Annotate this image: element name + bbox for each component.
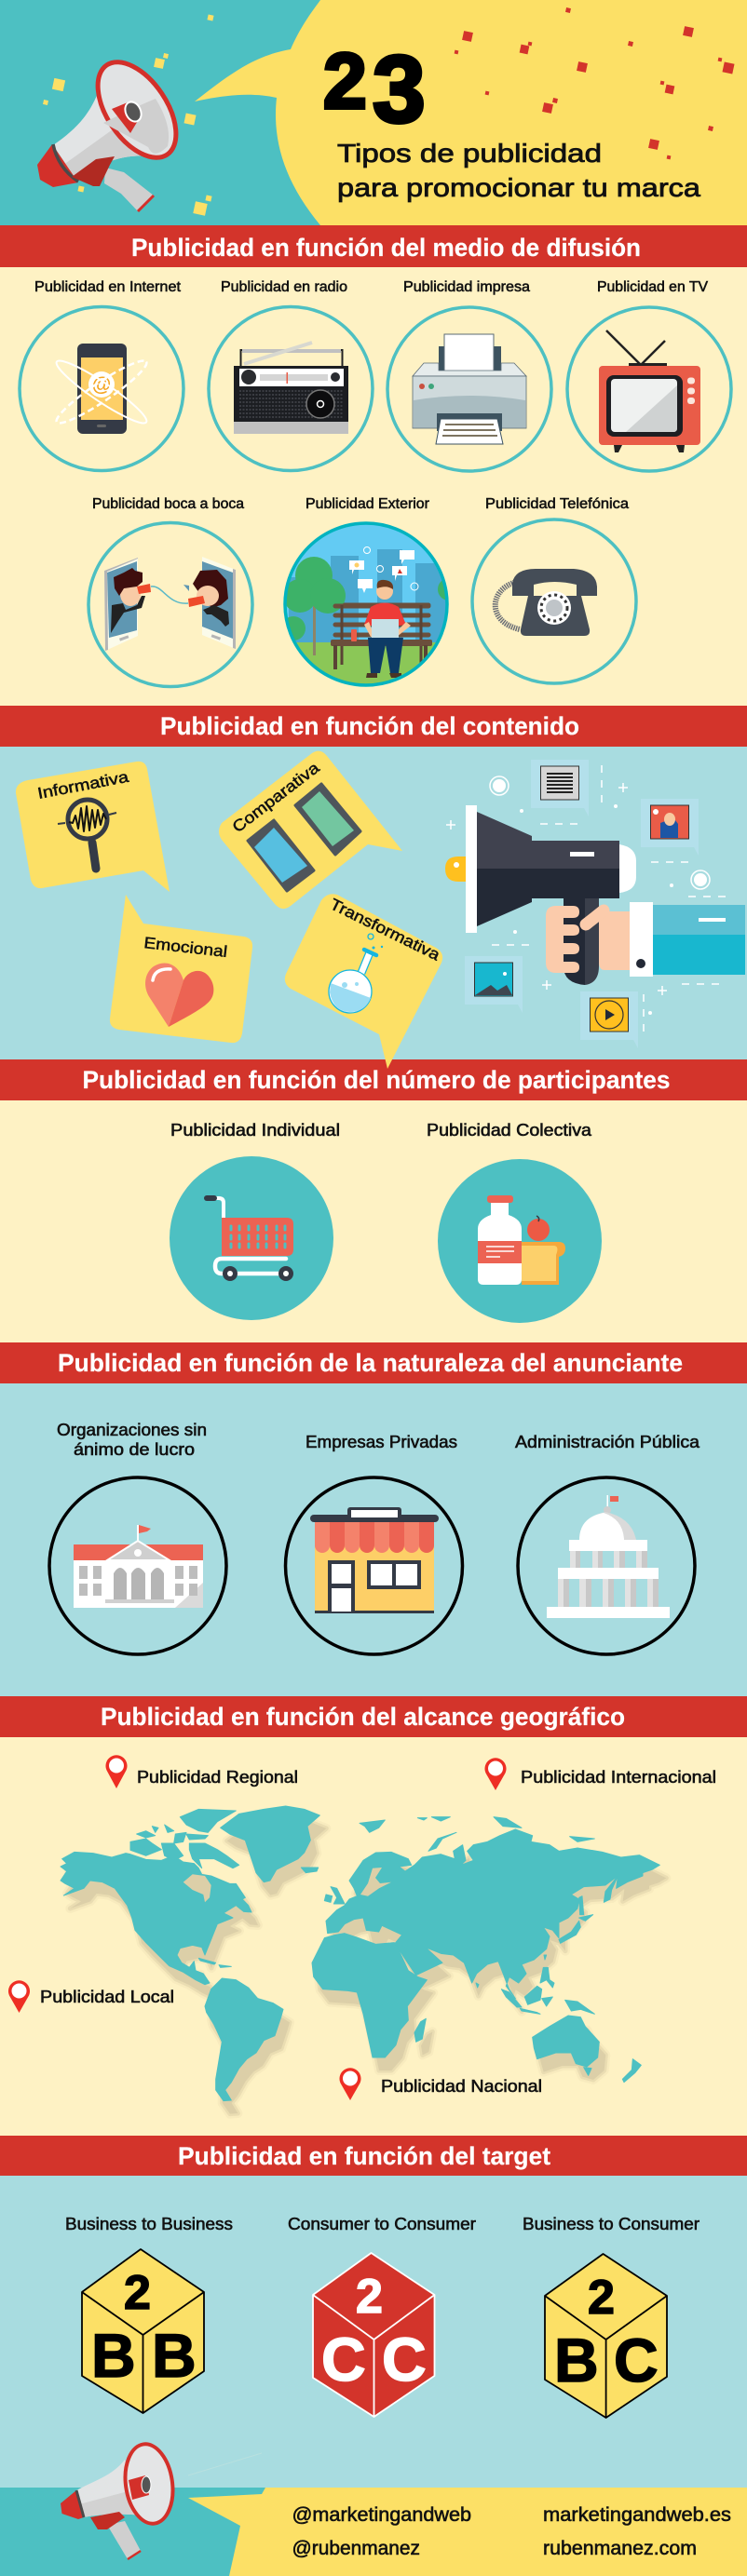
label: exterior: Publicidad Exterior (306, 496, 429, 512)
label: TV: Publicidad en TV (597, 279, 709, 295)
icon: video (580, 991, 638, 1048)
icon: portrait (641, 799, 699, 856)
label: internet: Publicidad en Internet (34, 279, 182, 295)
bubble: transformativa (285, 894, 443, 1069)
subtitle: Tipos de publicidad (337, 139, 602, 168)
icon: printer (387, 307, 551, 471)
pin: regional: Publicidad Regional (137, 1768, 298, 1787)
handle: marketingandweb: @marketingandweb (292, 2504, 471, 2526)
confetti: red squares (455, 7, 735, 159)
header panel (0, 0, 747, 225)
cube: B2B (82, 2249, 204, 2413)
label: telefonica: Publicidad Telefónica (485, 496, 629, 512)
cube: C2C: C (321, 2325, 366, 2394)
cube: B2C: B (554, 2326, 599, 2394)
pin: internacional: Publicidad Internacional (521, 1768, 716, 1787)
icon: institution (49, 1477, 226, 1654)
bubble: comparativa (219, 751, 402, 909)
icon: small megaphone (61, 2441, 178, 2559)
cube: C2C: 2 (356, 2270, 383, 2324)
icon: megaphone (37, 48, 192, 211)
label: administracion: Administración Pública (515, 1433, 700, 1451)
heading: Publicidad en función de la naturaleza del anunciante (58, 1349, 683, 1377)
bubble: comparativa: Comparativa (229, 759, 323, 836)
cube: C2C: C (382, 2325, 427, 2394)
map shadow (67, 1819, 666, 2114)
label: C2C: Consumer to Consumer (288, 2215, 476, 2233)
label: empresas: Empresas Privadas (306, 1433, 457, 1451)
icon: outdoor park scene (281, 522, 460, 689)
decorative dashes and dots (446, 765, 726, 1032)
pin: local: Publicidad Local (40, 1988, 174, 2006)
cube: B2C: 2 (588, 2271, 615, 2325)
bubble: informativa (16, 762, 170, 892)
heading: Publicidad en función del alcance geográfico (101, 1703, 625, 1731)
bubble: emocional (110, 895, 252, 1043)
website: rubenmanez.com: rubenmanez.com (543, 2538, 697, 2559)
illustration: megaphone in hand (445, 760, 745, 1048)
panel: numero de participantes (0, 1059, 747, 1342)
icon: smartphone (20, 307, 183, 471)
icon: rotary telephone (472, 519, 636, 683)
heading: Publicidad en función del número de participantes (82, 1066, 671, 1094)
hand (599, 911, 631, 970)
footer panel (0, 2441, 747, 2576)
panel: naturaleza del anunciante (0, 1342, 747, 1696)
icon: capitol building (518, 1477, 695, 1654)
heading band (0, 706, 747, 747)
bubble: transformativa: Transformativa (327, 896, 443, 964)
bubble: informativa: Informativa (36, 768, 130, 802)
cube: C2C (313, 2253, 434, 2417)
label: radio: Publicidad en radio (221, 279, 347, 295)
icon: shopping cart (170, 1156, 333, 1320)
inland seas (183, 1868, 391, 1902)
icon: word of mouth (88, 523, 252, 687)
heading band (0, 1059, 747, 1100)
icon: radio (209, 307, 373, 471)
cube: B2B: B (152, 2321, 197, 2390)
heading: Publicidad en función del medio de difusión (131, 234, 641, 262)
cube: B2C (545, 2254, 667, 2418)
footer speech bubble (188, 2488, 747, 2576)
cube: B2B: 2 (124, 2266, 151, 2320)
number 23: 3 (373, 36, 426, 142)
heading band (0, 2136, 747, 2176)
bubble: emocional: Emocional (143, 934, 228, 961)
icon: groceries (438, 1159, 602, 1323)
megaphone body (445, 856, 466, 882)
pin: internacional (484, 1758, 716, 1790)
label: organizaciones: Organizaciones sin (57, 1421, 207, 1439)
icon: document (531, 760, 589, 816)
title: para promocionar tu marca (337, 173, 700, 202)
panel: target (0, 2136, 747, 2488)
pin: local (8, 1980, 174, 2013)
icon: television (567, 307, 731, 471)
label: colectiva: Publicidad Colectiva (427, 1121, 592, 1140)
icon: picture (465, 956, 523, 1013)
sleeve (653, 905, 745, 935)
heading band (0, 1342, 747, 1383)
panel: medio de difusion (0, 225, 747, 706)
heading band (0, 1696, 747, 1737)
handle: rubenmanez: @rubenmanez (292, 2538, 420, 2559)
pin: nacional (339, 2068, 542, 2100)
heading: Publicidad en función del target (178, 2142, 550, 2170)
pin: nacional: Publicidad Nacional (381, 2077, 542, 2096)
label: B2C: Business to Consumer (523, 2215, 699, 2233)
label: B2B: Business to Business (65, 2215, 233, 2233)
panel: contenido (0, 706, 747, 1069)
label: individual: Publicidad Individual (170, 1121, 340, 1140)
heading: Publicidad en función del contenido (160, 712, 579, 740)
cube: B2C: C (614, 2326, 659, 2394)
title (323, 36, 700, 202)
confetti: yellow squares (43, 14, 214, 216)
cube: B2B: B (91, 2321, 136, 2390)
label: boca a boca: Publicidad boca a boca (92, 496, 244, 512)
icon: smartphone: @ (92, 374, 111, 396)
icon: storefront (285, 1477, 462, 1654)
panel: alcance geografico (0, 1696, 747, 2136)
pin: regional (105, 1755, 298, 1788)
speech bubble (195, 0, 747, 225)
number 23: 2 (323, 37, 367, 125)
heading band (0, 225, 747, 267)
label: animo de lucro: ánimo de lucro (74, 1440, 195, 1459)
world map (61, 1806, 659, 2101)
website: marketingandweb.es: marketingandweb.es (543, 2504, 731, 2526)
label: impresa: Publicidad impresa (403, 279, 530, 295)
